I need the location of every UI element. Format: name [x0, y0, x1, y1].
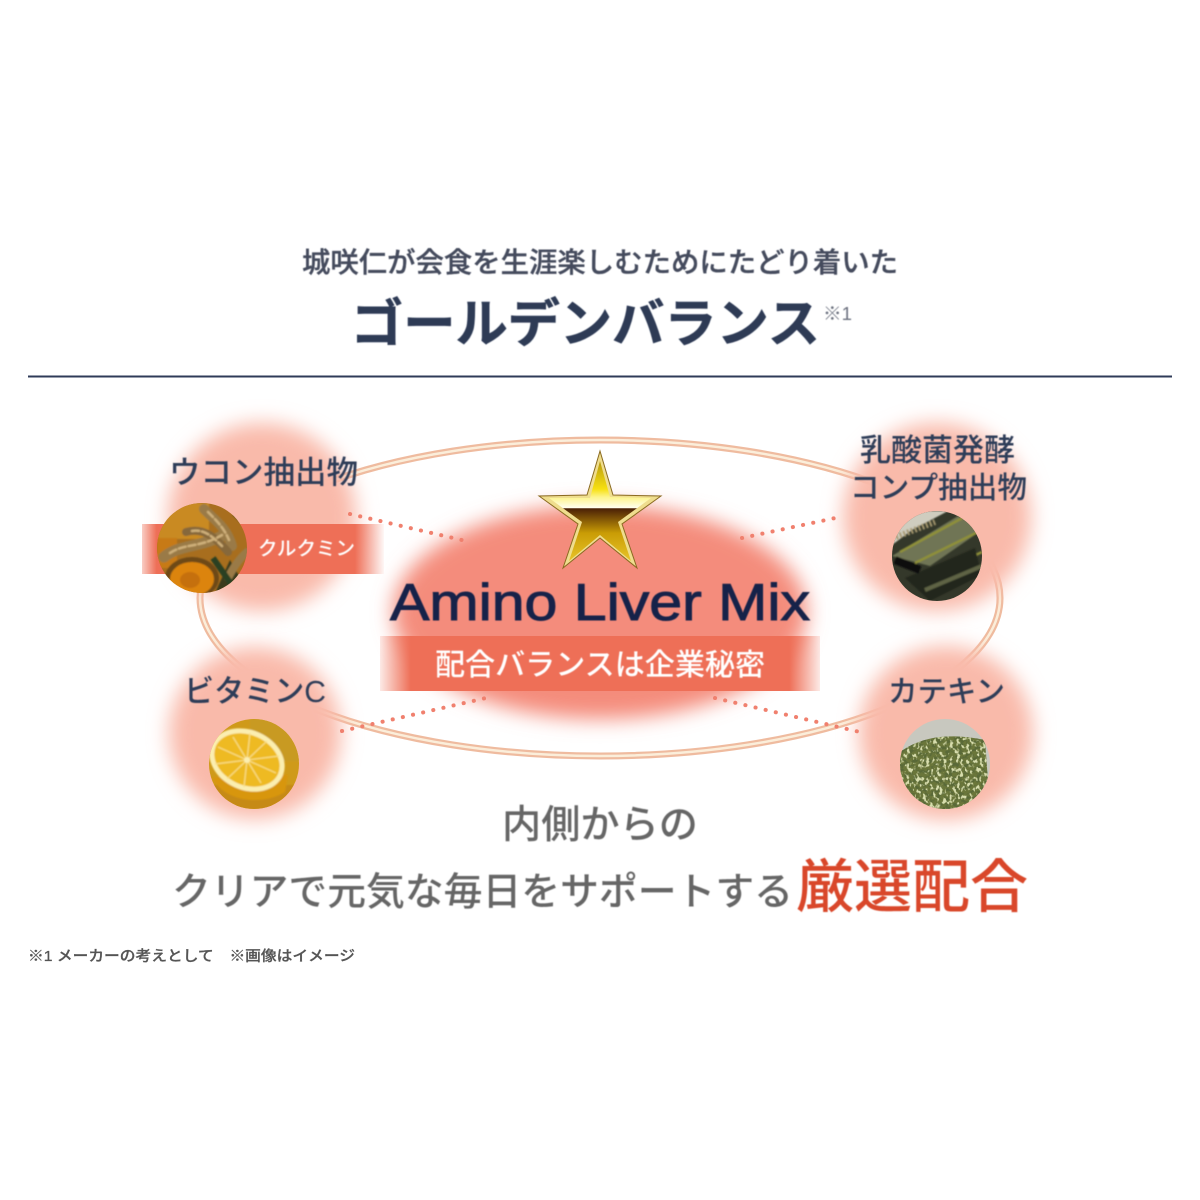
- curcumin band: [142, 524, 384, 574]
- secret-blend label: 配合バランスは企業秘密: [435, 649, 765, 682]
- secret-blend band: [380, 636, 820, 691]
- label: turmeric extract: ウコン抽出物: [169, 454, 358, 490]
- product name: Amino Liver Mix: [390, 574, 810, 632]
- intro heading: 城咲仁が会食を生涯楽しむためにたどり着いた: [302, 247, 898, 278]
- title: ゴールデンバランス: [351, 296, 820, 354]
- closing line two: クリアで元気な毎日をサポートする: [172, 871, 793, 914]
- divider rule: [28, 376, 1172, 378]
- title: ※1: [823, 304, 852, 324]
- closing line two: [172, 855, 1028, 920]
- highlight: carefully selected blend: 厳選配合: [796, 855, 1028, 920]
- ellipse connector ring: [200, 440, 1000, 756]
- label: lactic-fermented kelp extract: [850, 433, 1027, 505]
- gold star: [539, 451, 661, 568]
- photo: kelp: [892, 511, 982, 601]
- photo: green tea: [900, 719, 990, 809]
- ingredient glow: catechin: [859, 646, 1033, 820]
- photo: turmeric: [157, 503, 247, 599]
- ingredient glow: vitamin C: [169, 647, 341, 819]
- central glow: [393, 505, 807, 719]
- curcumin label: クルクミン: [258, 538, 355, 560]
- ingredient glow: turmeric: [168, 423, 356, 611]
- dotted connectors: [342, 514, 860, 732]
- closing line one: 内側からの: [502, 804, 698, 847]
- ingredient glow: kelp: [843, 423, 1031, 611]
- label: catechin: カテキン: [888, 676, 1005, 709]
- label: lactic-fermented kelp extract: 乳酸菌発酵: [860, 433, 1015, 468]
- label: vitamin C: ビタミンC: [184, 674, 326, 709]
- footnote: ※1 メーカーの考えとして ※画像はイメージ: [28, 948, 355, 965]
- photo: lemon: [209, 719, 299, 809]
- label: lactic-fermented kelp extract: コンプ抽出物: [850, 472, 1027, 505]
